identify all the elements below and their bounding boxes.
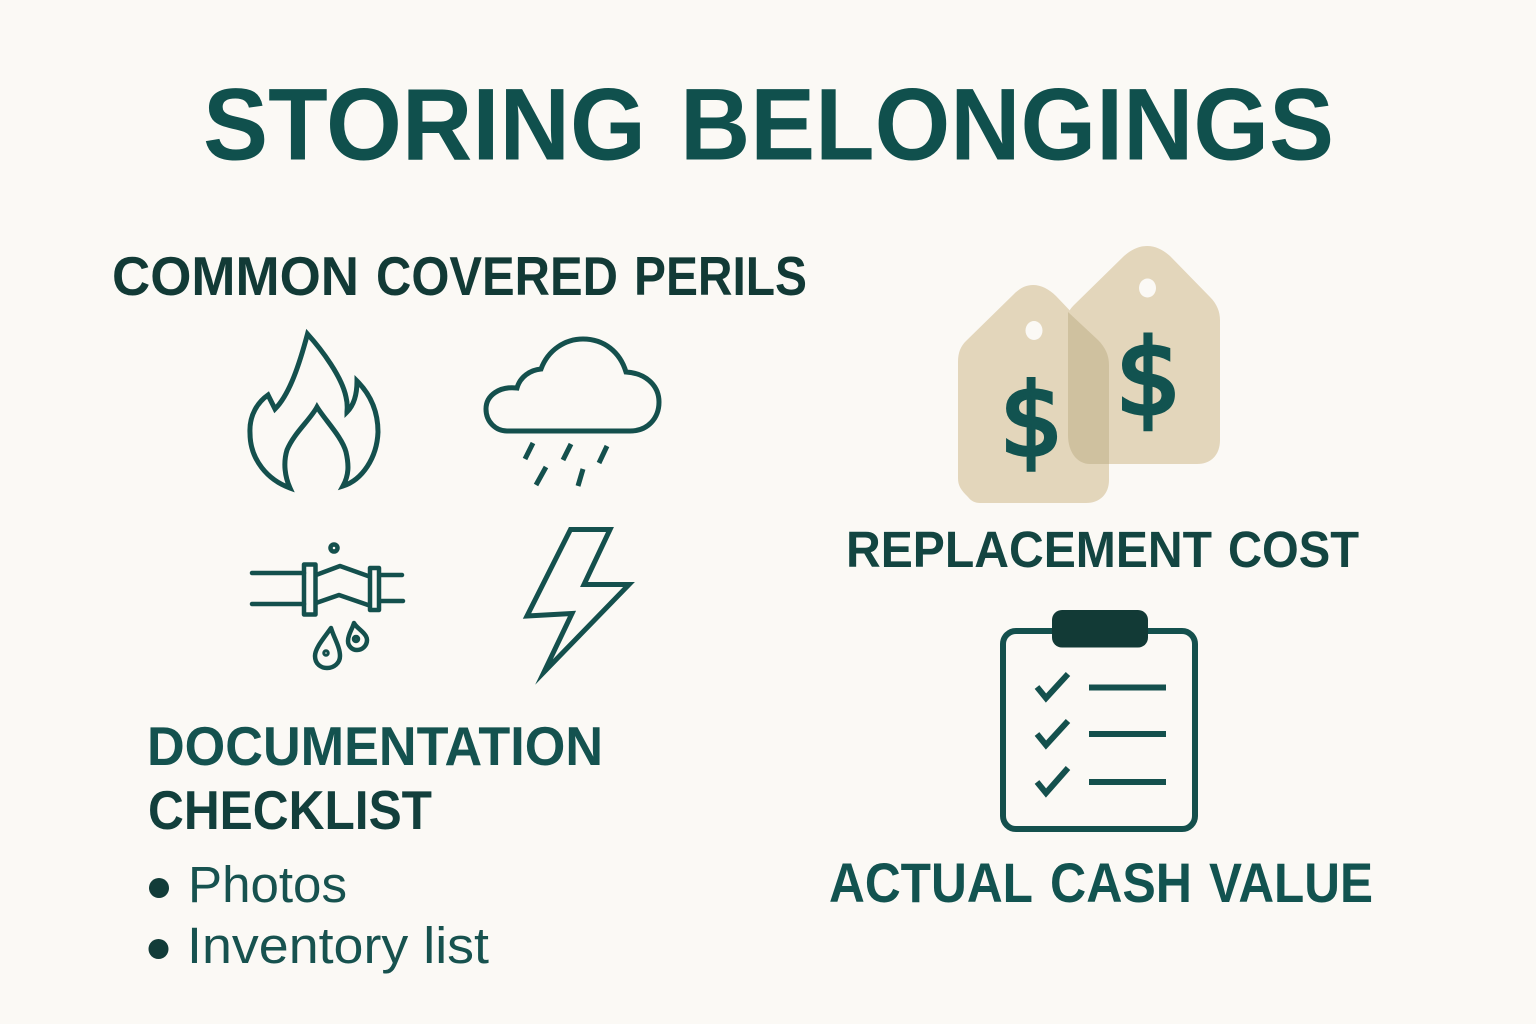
icon: price tags: $ — [1000, 362, 1063, 479]
bullet list — [148, 856, 489, 974]
label: actual cash value: VALUE — [1209, 851, 1373, 914]
heading: documentation checklist: CHECKLIST — [148, 779, 432, 841]
title — [203, 68, 1334, 182]
bullet list: Photos — [188, 856, 347, 913]
heading: common covered perils — [112, 245, 807, 307]
heading: documentation checklist: DOCUMENTATION — [147, 715, 603, 777]
heading: common covered perils: COVERED — [376, 245, 618, 307]
heading: common covered perils: COMMON — [112, 245, 359, 307]
label: actual cash value — [829, 851, 1373, 914]
title: STORING — [203, 68, 646, 182]
icon: rain cloud — [486, 339, 659, 486]
heading: common covered perils: PERILS — [634, 245, 807, 307]
icon: clipboard checklist — [1003, 610, 1195, 829]
heading: documentation checklist — [147, 715, 603, 841]
label: actual cash value: CASH — [1050, 851, 1192, 914]
icon: leaking pipe — [252, 544, 403, 668]
icon: lightning bolt — [527, 530, 629, 672]
label: actual cash value: ACTUAL — [829, 851, 1033, 914]
icon: fire — [250, 334, 378, 488]
icon: price tags: $ — [1115, 317, 1182, 439]
label: replacement cost: REPLACEMENT — [846, 521, 1212, 578]
icon: price tags — [958, 246, 1220, 503]
title: BELONGINGS — [680, 68, 1334, 182]
label: replacement cost: COST — [1228, 521, 1359, 578]
bullet list: Inventory list — [187, 917, 489, 974]
